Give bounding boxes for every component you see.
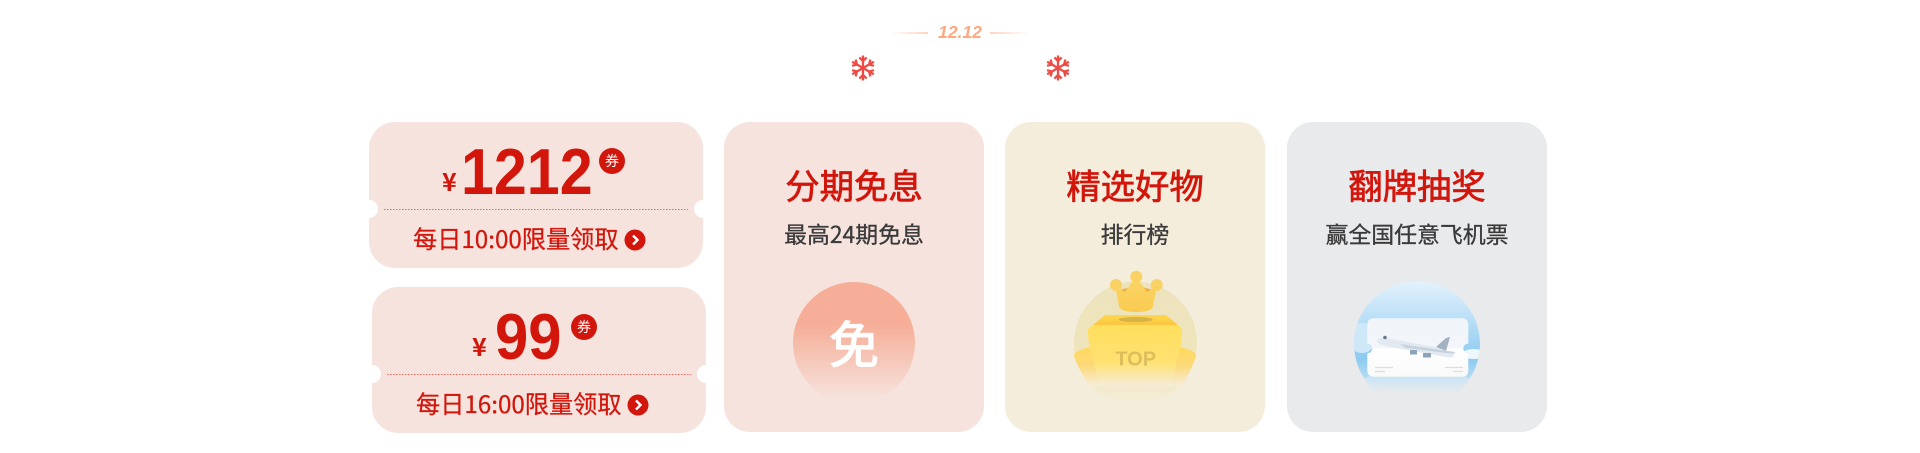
panel: coupon 99 — [372, 287, 706, 433]
currency symbol: ¥ — [472, 328, 487, 364]
ticket text lines — [1375, 368, 1463, 372]
amount: 99 — [495, 300, 562, 373]
podium body — [1088, 325, 1182, 387]
icon: arrow — [624, 230, 646, 250]
clouds — [1354, 323, 1480, 400]
icon: free badge — [793, 282, 915, 404]
amount: 1212 — [461, 135, 593, 208]
plane — [1377, 336, 1455, 358]
heading: 精选好物 — [1066, 159, 1204, 209]
TOP label: TOP — [1115, 348, 1156, 370]
coupon badge: 券 — [577, 317, 591, 337]
call to action: 每日16:00限量领取 — [416, 385, 622, 420]
icon: free badge: 免 — [829, 306, 879, 378]
icon: arrow — [628, 394, 648, 416]
subheading: 排行榜 — [1101, 216, 1169, 250]
subheading: 最高24期免息 — [784, 216, 924, 250]
left line — [890, 32, 928, 34]
panel: flip lottery — [1287, 122, 1547, 432]
crown — [1110, 271, 1163, 312]
icon: crown podium — [1074, 270, 1197, 395]
ticket — [1367, 318, 1468, 377]
podium top — [1093, 315, 1178, 325]
icon: plane ticket — [1354, 281, 1480, 398]
coupon badge — [571, 314, 597, 340]
wings — [1074, 346, 1106, 386]
panel: installment — [724, 122, 984, 432]
heading: 分期免息 — [785, 159, 923, 209]
icon: right snowflake — [1046, 56, 1070, 80]
heading: 翻牌抽奖 — [1348, 159, 1486, 209]
panel: selected goods — [1005, 122, 1265, 432]
right line — [990, 32, 1030, 34]
icon: left snowflake — [852, 56, 874, 80]
subheading: 赢全国任意飞机票 — [1325, 216, 1509, 250]
currency symbol: ¥ — [442, 163, 457, 199]
coupon badge — [599, 148, 625, 174]
call to action: 每日10:00限量领取 — [413, 220, 619, 255]
panel: coupon 1212 — [369, 122, 703, 268]
coupon badge: 券 — [605, 151, 619, 171]
date label: 12.12 — [938, 22, 982, 42]
